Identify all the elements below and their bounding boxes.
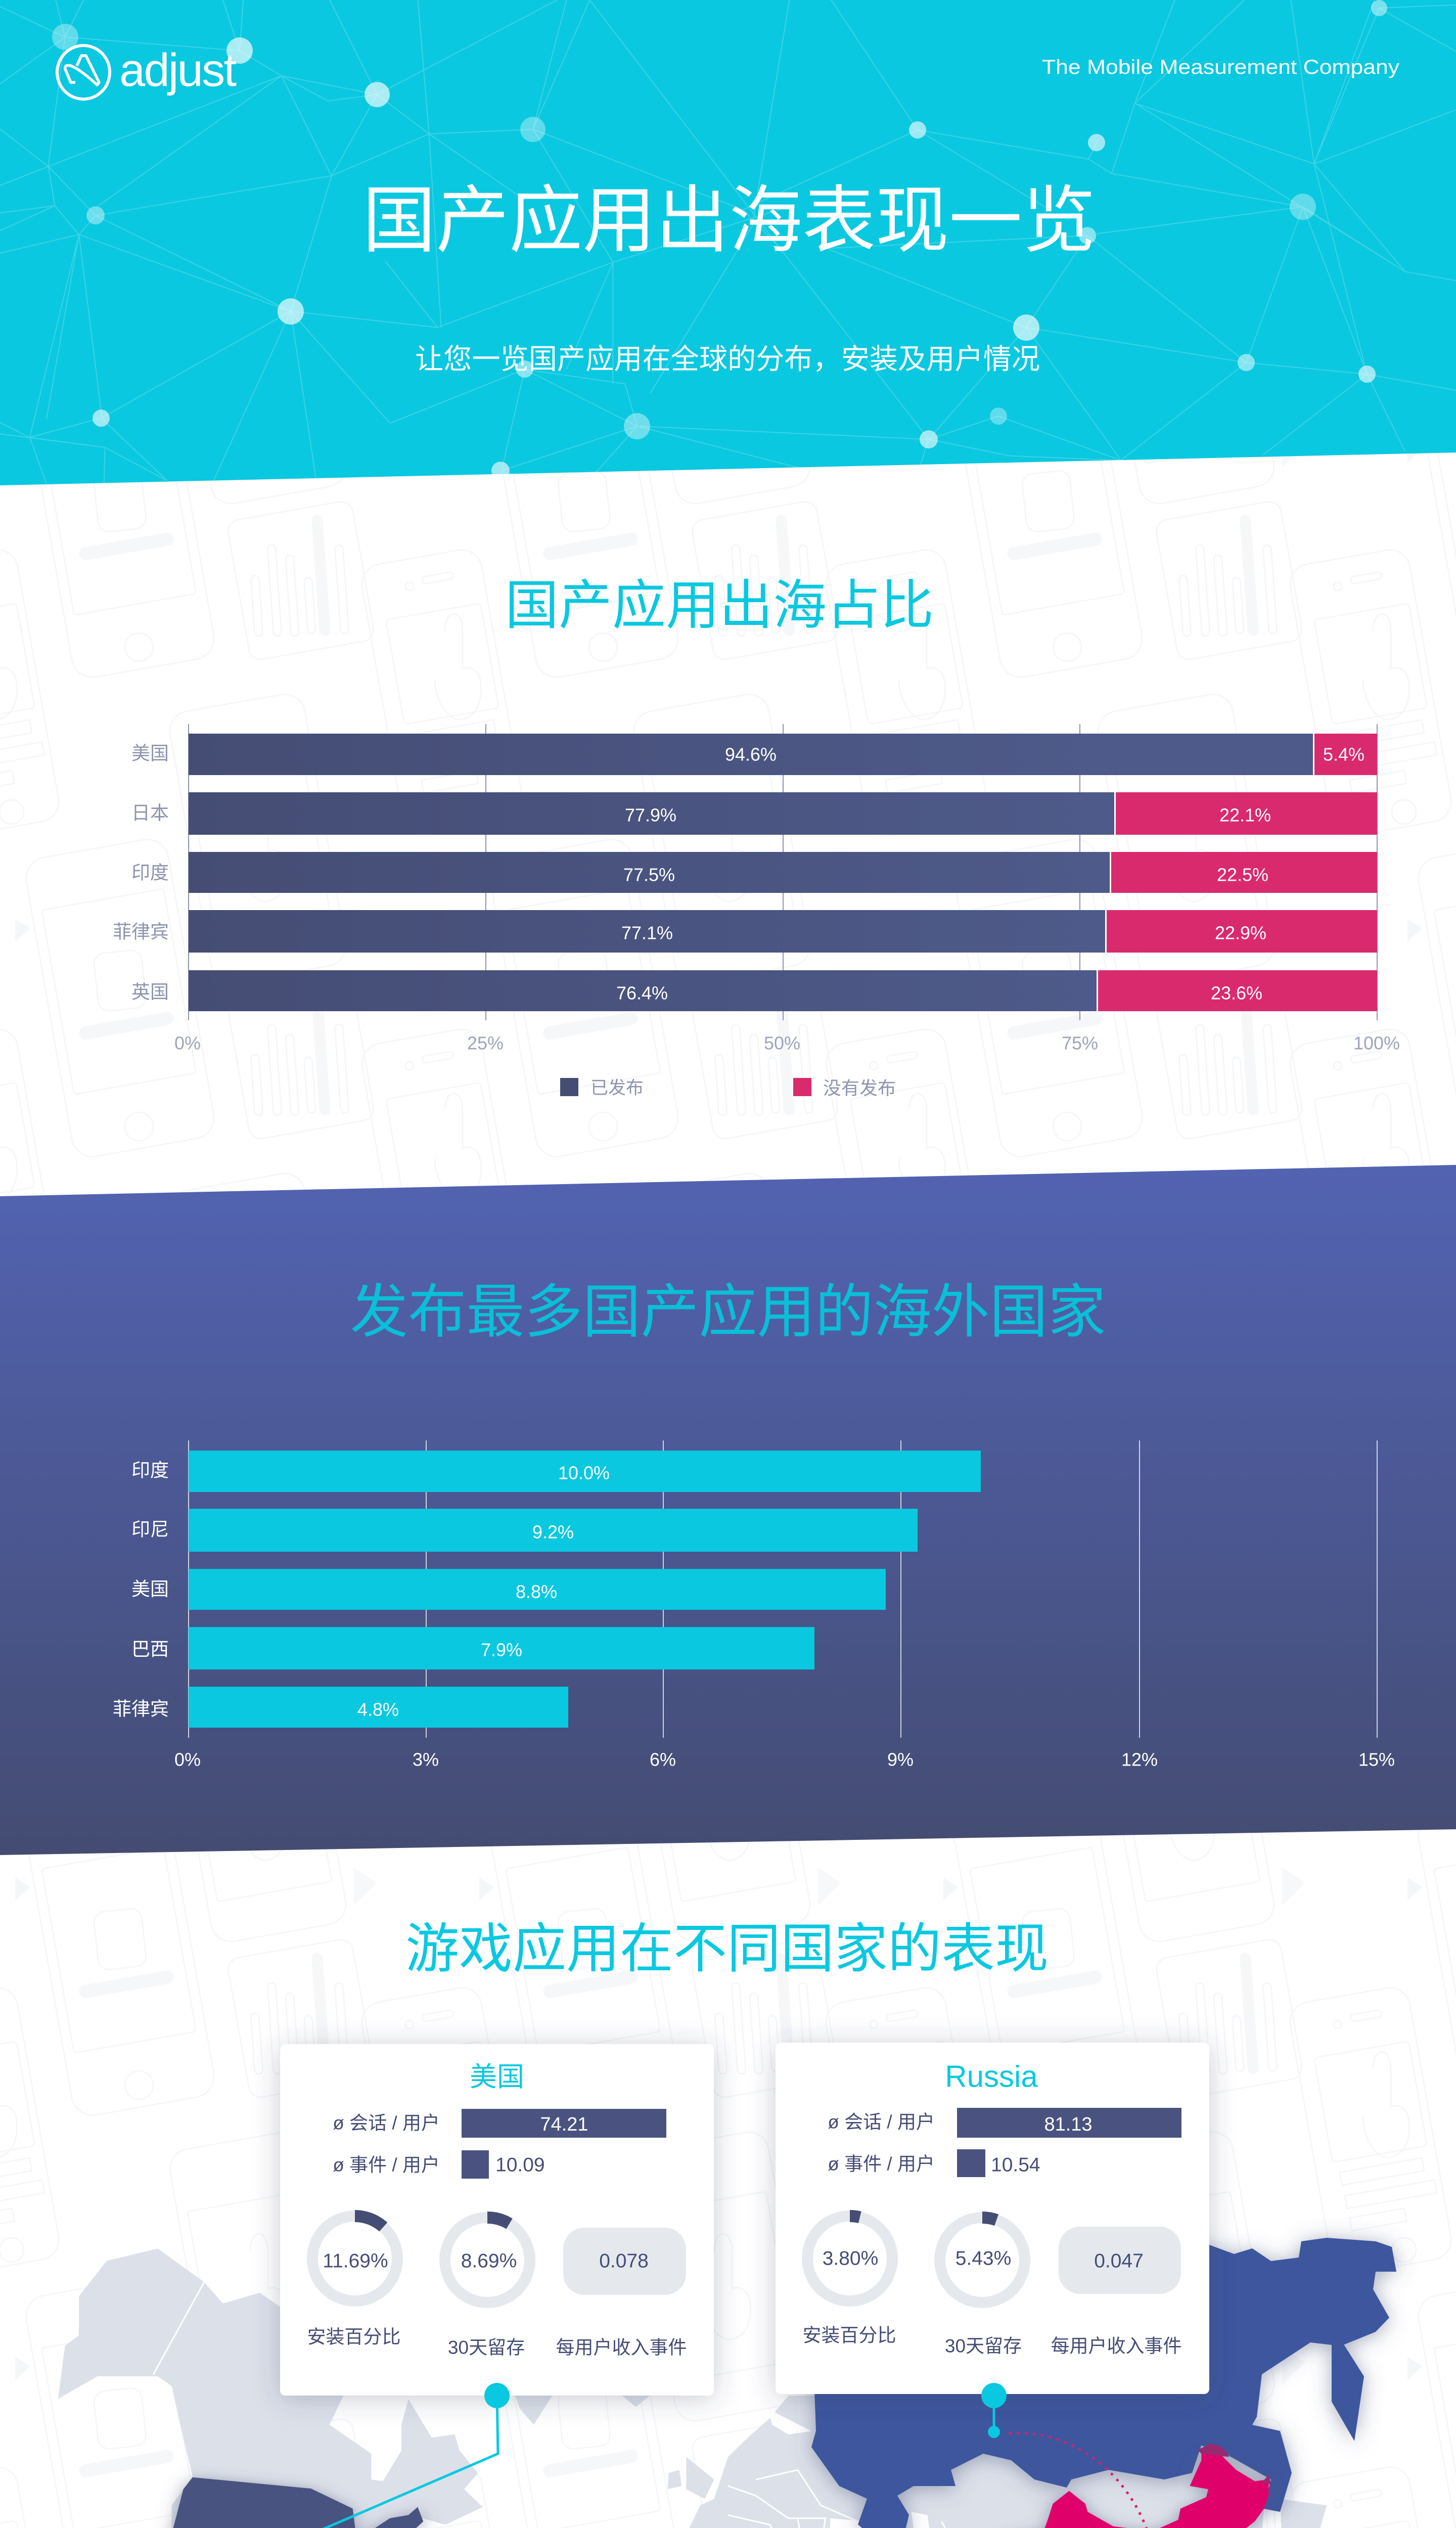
- card: USA: 0.078: [599, 2250, 649, 2272]
- tagline: The Mobile Measurement Company: [1042, 56, 1399, 78]
- panel: header banner: [0, 0, 1456, 485]
- row: Philippines: [113, 910, 1377, 953]
- x axis labels: 3%: [413, 1749, 439, 1770]
- world map: [58, 2225, 1396, 2528]
- row: USA: 5.4%: [1323, 744, 1364, 764]
- map: USA highlight: [171, 2477, 423, 2528]
- x axis labels: 9%: [887, 1749, 914, 1770]
- row: UK: 76.4%: [616, 983, 668, 1003]
- card: Russia: 3.80%: [823, 2248, 878, 2269]
- row: Philippines: 22.9%: [1215, 922, 1266, 943]
- card: USA: 8.69%: [461, 2250, 517, 2272]
- row: Japan: 77.9%: [625, 805, 676, 825]
- map: Eurasia and Africa: [631, 2396, 1382, 2528]
- card: USA: 30天留存: [448, 2337, 525, 2358]
- logo: adjust: adjust: [119, 44, 237, 96]
- x axis labels: 0%: [174, 1032, 201, 1054]
- card: Russia: 安装百分比: [803, 2325, 896, 2346]
- card: Russia: ø 事件 / 用户: [828, 2154, 935, 2174]
- row: UK: 英国: [131, 982, 169, 1002]
- title: 国产应用出海表现一览: [362, 179, 1096, 261]
- card: Russia: [776, 2043, 1209, 2394]
- row: Philippines: 菲律宾: [113, 921, 169, 942]
- row: Japan: [131, 792, 1377, 835]
- row: India: 印度: [131, 863, 169, 883]
- card: Russia: 81.13: [1044, 2114, 1093, 2135]
- card: Russia: Russia: [945, 2060, 1038, 2093]
- card: USA: 美国: [470, 2062, 524, 2092]
- bar: Indonesia: 印尼: [131, 1519, 169, 1540]
- row: India: 77.5%: [623, 865, 675, 885]
- heading: share of apps: 国产应用出海占比: [505, 576, 934, 636]
- x axis labels: 15%: [1358, 1749, 1395, 1770]
- bar: Philippines: 菲律宾: [113, 1699, 169, 1719]
- map: Russia highlight: [811, 2225, 1396, 2528]
- x axis labels: [174, 1032, 1400, 1054]
- heading: top overseas countries: 发布最多国产应用的海外国家: [350, 1280, 1106, 1344]
- legend: 没有发布: [823, 1078, 896, 1098]
- card: USA: 10.09: [495, 2154, 545, 2176]
- card: Russia: 每用户收入事件: [1051, 2336, 1182, 2356]
- card: Russia: 0.047: [1094, 2250, 1144, 2272]
- row: India: 22.5%: [1217, 865, 1268, 885]
- card: Russia: 30天留存: [945, 2336, 1022, 2356]
- row: India: [131, 852, 1377, 893]
- bar: Philippines: [113, 1687, 568, 1728]
- x axis labels: 12%: [1121, 1749, 1158, 1770]
- row: UK: [131, 970, 1377, 1011]
- panel: top overseas countries: [0, 1165, 1456, 1855]
- row: USA: 94.6%: [725, 744, 777, 764]
- subtitle: 让您一览国产应用在全球的分布，安装及用户情况: [415, 343, 1040, 375]
- x axis labels: 100%: [1353, 1032, 1400, 1054]
- network nodes: [52, 0, 1387, 480]
- x axis labels: 0%: [174, 1749, 201, 1770]
- legend: [560, 1078, 896, 1098]
- card: USA: ø 事件 / 用户: [333, 2155, 440, 2175]
- card: Russia: ø 会话 / 用户: [828, 2111, 935, 2133]
- row: USA: [131, 734, 1377, 775]
- bar: India: 印度: [131, 1460, 169, 1480]
- row: Japan: 日本: [131, 803, 169, 823]
- bar: USA: 8.8%: [516, 1582, 557, 1602]
- row: USA: 美国: [131, 743, 169, 763]
- bar: Philippines: 4.8%: [357, 1699, 399, 1720]
- bar: Indonesia: 9.2%: [532, 1522, 574, 1542]
- bar: India: [131, 1451, 981, 1492]
- card: USA: 每用户收入事件: [556, 2337, 687, 2358]
- row: UK: 23.6%: [1211, 983, 1262, 1003]
- x axis labels: 50%: [764, 1032, 800, 1054]
- card: USA: 74.21: [540, 2114, 588, 2135]
- bar: Indonesia: [131, 1509, 918, 1552]
- network lines background: [0, 0, 1456, 484]
- bar: Brazil: 巴西: [131, 1639, 169, 1659]
- bar: Brazil: [131, 1627, 814, 1669]
- card: USA: [280, 2044, 714, 2396]
- card: USA: ø 会话 / 用户: [333, 2112, 440, 2134]
- bar: India: 10.0%: [558, 1462, 610, 1483]
- x axis labels: [174, 1749, 1395, 1770]
- card: USA: 11.69%: [323, 2250, 388, 2272]
- row: Japan: 22.1%: [1219, 805, 1271, 825]
- connector pins: [259, 2383, 1276, 2528]
- map: China, Myanmar, Philippines, Indonesia highlights: [997, 2444, 1343, 2528]
- card: Russia: 5.43%: [956, 2248, 1011, 2269]
- card: USA: 安装百分比: [307, 2327, 400, 2347]
- stacked bar chart: published vs not published: [113, 724, 1400, 1054]
- card: Russia: 10.54: [991, 2154, 1040, 2176]
- row: Philippines: 77.1%: [621, 922, 673, 943]
- x axis labels: 75%: [1062, 1032, 1098, 1054]
- bar: USA: [131, 1569, 886, 1610]
- heading: game apps by country: 游戏应用在不同国家的表现: [405, 1919, 1049, 1979]
- logo: adjust: [57, 44, 237, 99]
- dotted flow lines: [290, 2433, 1314, 2528]
- bar: USA: 美国: [131, 1578, 169, 1600]
- x axis labels: 6%: [650, 1749, 676, 1770]
- bar: Brazil: 7.9%: [481, 1639, 522, 1660]
- horizontal bar chart: [113, 1440, 1395, 1770]
- x axis labels: 25%: [467, 1032, 504, 1054]
- legend: 已发布: [590, 1078, 644, 1098]
- map: Americas: [58, 2248, 650, 2528]
